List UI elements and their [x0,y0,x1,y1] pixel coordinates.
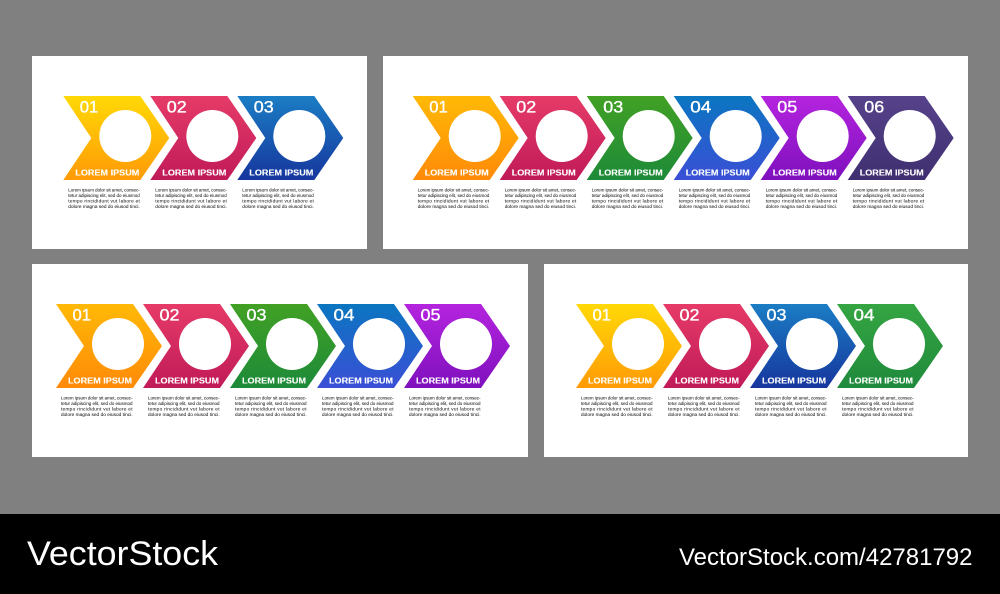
step 01: LOREM IPSUM [588,376,652,386]
step 03: tetur adipiscing elit, sed do eiusmod [242,193,314,198]
step 03: LOREM IPSUM [599,168,663,178]
step 02: tempo rincididunt vut labore et [148,406,220,411]
step 02 [500,96,606,209]
step 03: Lorem ipsum dolor sit amet, consec- [755,395,827,400]
panel: six steps [383,56,968,249]
step 01: Lorem ipsum dolor sit amet, consec- [418,187,490,192]
step 03 [230,304,336,417]
step 02 [663,304,769,417]
step 04: tetur adipiscing elit, sed do eiusmod [322,401,394,406]
step 01 [413,96,519,209]
step 04: 04 [334,307,354,325]
step 06: tetur adipiscing elit, sed do eiusmod [853,193,925,198]
step 01 [576,304,682,417]
step 01: tempo rincididunt vut labore et [581,406,653,411]
step 01: 01 [592,307,611,325]
panel: five steps [32,264,528,457]
step 02: LOREM IPSUM [162,168,226,178]
step 04: Lorem ipsum dolor sit amet, consec- [842,395,914,400]
step 03: tetur adipiscing elit, sed do eiusmod [235,401,307,406]
step 01: 01 [72,307,91,325]
step 03: dolore magna sed do eiusod tinci. [235,412,306,417]
step 04 [317,304,423,417]
step 05 [761,96,867,209]
step 01 [63,96,169,209]
step 02: LOREM IPSUM [512,168,576,178]
step 02: 02 [680,307,700,325]
step 05: tetur adipiscing elit, sed do eiusmod [766,193,838,198]
step 04: Lorem ipsum dolor sit amet, consec- [679,187,751,192]
step 01: dolore magna sed do eiusod tinci. [68,204,140,209]
step 02: 02 [167,99,187,117]
step 01 [56,304,162,417]
step 04: tetur adipiscing elit, sed do eiusmod [679,193,751,198]
step 05: Lorem ipsum dolor sit amet, consec- [766,187,838,192]
step 03: Lorem ipsum dolor sit amet, consec- [592,187,664,192]
step 05: dolore magna sed do eiusod tinci. [766,204,837,209]
step 03: tempo rincididunt vut labore et [242,198,314,203]
step 01: 01 [80,99,98,117]
step 04: tempo rincididunt vut labore et [322,406,394,411]
step 02: LOREM IPSUM [155,376,219,386]
step 02: tempo rincididunt vut labore et [505,198,577,203]
step 05: tempo rincididunt vut labore et [766,198,838,203]
step 02: dolore magna sed do eiusod tinci. [148,412,220,417]
step 04: tempo rincididunt vut labore et [842,406,914,411]
step 03: dolore magna sed do eiusod tinci. [242,204,314,209]
step 01: 01 [429,99,448,117]
step 05: LOREM IPSUM [416,376,480,386]
step 01: tempo rincididunt vut labore et [418,198,490,203]
step 03: LOREM IPSUM [762,376,826,386]
step 01: LOREM IPSUM [75,168,139,178]
step 03 [237,96,343,209]
step 01: Lorem ipsum dolor sit amet, consec- [68,187,140,192]
step 04 [674,96,780,209]
step 04: LOREM IPSUM [849,376,913,386]
step 03: LOREM IPSUM [242,376,306,386]
image reference: VectorStock.com/42781792 [679,544,972,571]
step 05: tempo rincididunt vut labore et [409,406,481,411]
step 01: dolore magna sed do eiusod tinci. [418,204,489,209]
step 01: LOREM IPSUM [425,168,489,178]
step 02 [150,96,256,209]
step 03: 03 [603,99,623,117]
step 01: dolore magna sed do eiusod tinci. [61,412,132,417]
step 04 [837,304,943,417]
step 05 [404,304,510,417]
step 01: tetur adipiscing elit, sed do eiusmod [418,193,490,198]
step 05: 05 [420,307,440,325]
step 01: Lorem ipsum dolor sit amet, consec- [61,395,133,400]
step 02 [143,304,249,417]
step 01: tetur adipiscing elit, sed do eiusmod [581,401,653,406]
step 04: LOREM IPSUM [329,376,393,386]
step 03: dolore magna sed do eiusod tinci. [592,204,663,209]
step 03: tetur adipiscing elit, sed do eiusmod [592,193,664,198]
step 03 [750,304,856,417]
step 01: LOREM IPSUM [68,376,132,386]
step 04: dolore magna sed do eiusod tinci. [322,412,394,417]
step 02: tetur adipiscing elit, sed do eiusmod [668,401,740,406]
step 03: 03 [246,307,266,325]
step 06: LOREM IPSUM [860,168,924,178]
step 02: dolore magna sed do eiusod tinci. [505,204,576,209]
step 02: dolore magna sed do eiusod tinci. [155,204,227,209]
step 04: LOREM IPSUM [686,168,750,178]
step 04: dolore magna sed do eiusod tinci. [842,412,914,417]
step 01: Lorem ipsum dolor sit amet, consec- [581,395,653,400]
step 03: LOREM IPSUM [249,168,313,178]
footer bar [0,514,1000,594]
step 03: tetur adipiscing elit, sed do eiusmod [755,401,827,406]
step 04: tempo rincididunt vut labore et [679,198,751,203]
step 05: 05 [777,99,797,117]
step 04: Lorem ipsum dolor sit amet, consec- [322,395,394,400]
step 06: Lorem ipsum dolor sit amet, consec- [853,187,925,192]
step 06: dolore magna sed do eiusod tinci. [853,204,924,209]
step 03: 03 [766,307,786,325]
step 06 [848,96,954,209]
panel: three steps [32,56,367,249]
step 04: 04 [690,99,711,117]
step 05: LOREM IPSUM [773,168,837,178]
step 03: dolore magna sed do eiusod tinci. [755,412,826,417]
step 02: tetur adipiscing elit, sed do eiusmod [148,401,220,406]
step 02: Lorem ipsum dolor sit amet, consec- [505,187,577,192]
step 02: tetur adipiscing elit, sed do eiusmod [155,193,227,198]
step 03: tempo rincididunt vut labore et [755,406,827,411]
step 03: tempo rincididunt vut labore et [235,406,307,411]
step 01: tempo rincididunt vut labore et [68,198,140,203]
step 05: tetur adipiscing elit, sed do eiusmod [409,401,481,406]
step 02: tetur adipiscing elit, sed do eiusmod [505,193,577,198]
step 02: Lorem ipsum dolor sit amet, consec- [668,395,740,400]
step 01: dolore magna sed do eiusod tinci. [581,412,652,417]
step 02: dolore magna sed do eiusod tinci. [668,412,740,417]
step 02: Lorem ipsum dolor sit amet, consec- [155,187,227,192]
step 02: tempo rincididunt vut labore et [668,406,740,411]
step 04: tetur adipiscing elit, sed do eiusmod [842,401,914,406]
step 04: 04 [854,307,874,325]
step 01: tetur adipiscing elit, sed do eiusmod [68,193,140,198]
brand wordmark: VectorStock [27,535,219,573]
step 03: Lorem ipsum dolor sit amet, consec- [235,395,307,400]
step 02: 02 [516,99,536,117]
step 03: 03 [254,99,274,117]
step 02: 02 [160,307,180,325]
step 03: Lorem ipsum dolor sit amet, consec- [242,187,314,192]
step 03 [587,96,693,209]
step 02: tempo rincididunt vut labore et [155,198,227,203]
step 02: LOREM IPSUM [675,376,739,386]
panel: four steps [544,264,968,457]
step 04: dolore magna sed do eiusod tinci. [679,204,750,209]
step 01: tetur adipiscing elit, sed do eiusmod [61,401,133,406]
step 06: 06 [864,99,884,117]
step 05: Lorem ipsum dolor sit amet, consec- [409,395,481,400]
step 03: tempo rincididunt vut labore et [592,198,664,203]
step 06: tempo rincididunt vut labore et [853,198,925,203]
step 02: Lorem ipsum dolor sit amet, consec- [148,395,220,400]
step 05: dolore magna sed do eiusod tinci. [409,412,480,417]
step 01: tempo rincididunt vut labore et [61,406,133,411]
